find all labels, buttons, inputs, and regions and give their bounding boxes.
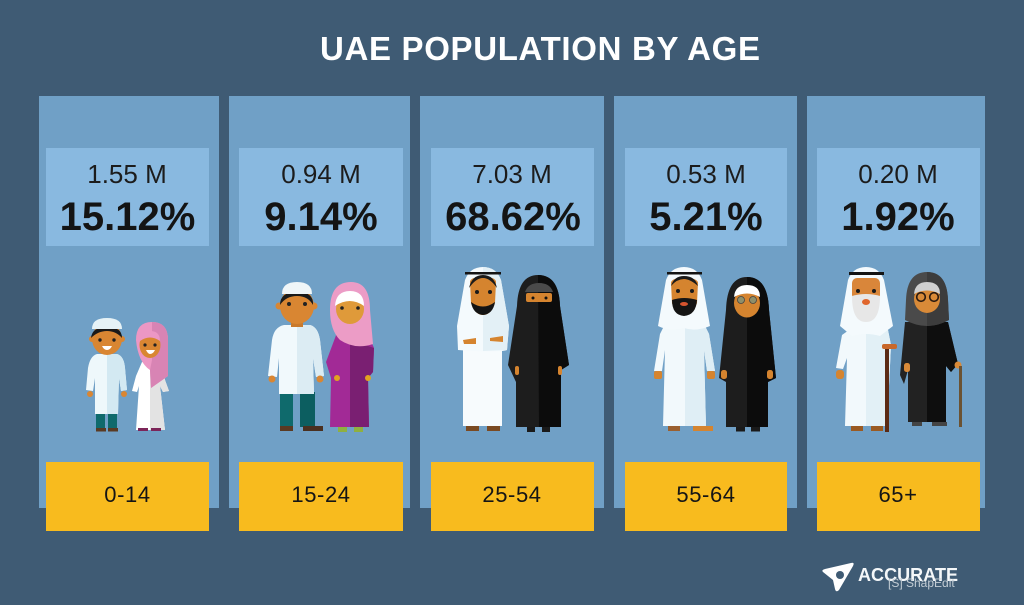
figures: older adults bbox=[654, 267, 776, 432]
figures: adults bbox=[457, 267, 569, 432]
logo wordmark: ACCURATE bbox=[858, 565, 958, 585]
stat box: 15-24: 9.14% bbox=[264, 195, 378, 239]
age label: 0-14: 0-14 bbox=[104, 482, 151, 507]
stat box: 25-54: 7.03 M bbox=[472, 159, 552, 189]
stat box: 0-14: 15.12% bbox=[60, 195, 195, 239]
age label: 15-24: 15-24 bbox=[291, 482, 351, 507]
watermark: [S] ShapEdit bbox=[888, 576, 955, 590]
stat box: 55-64: 5.21% bbox=[649, 195, 763, 239]
age label: 55-64 bbox=[625, 462, 787, 531]
stat box: 0-14: 1.55 M bbox=[87, 159, 167, 189]
stat box: 15-24: 0.94 M bbox=[281, 159, 361, 189]
age label: 15-24 bbox=[239, 462, 403, 531]
title: UAE POPULATION BY AGE bbox=[320, 30, 760, 67]
stat box: 55-64 bbox=[625, 148, 787, 246]
age label: 65+: 65+ bbox=[878, 482, 918, 507]
panel: age 0-14 bbox=[39, 96, 219, 531]
stat box: 65+: 1.92% bbox=[841, 195, 955, 239]
age label: 25-54: 25-54 bbox=[482, 482, 542, 507]
panel: age 55-64 bbox=[614, 96, 797, 531]
logo: Accurate bbox=[822, 563, 958, 591]
figures: seniors bbox=[836, 267, 962, 432]
stat box: 0-14 bbox=[46, 148, 209, 246]
age label: 0-14 bbox=[46, 462, 209, 531]
stat box: 25-54 bbox=[431, 148, 594, 246]
figures: youth bbox=[268, 282, 374, 432]
panel: age 65+ bbox=[807, 96, 985, 531]
age label: 25-54 bbox=[431, 462, 594, 531]
stat box: 65+ bbox=[817, 148, 980, 246]
panel: age 25-54 bbox=[420, 96, 604, 531]
figures: children bbox=[86, 318, 169, 432]
stat box: 65+: 0.20 M bbox=[858, 159, 938, 189]
panel: age 15-24 bbox=[229, 96, 410, 531]
stat box: 15-24 bbox=[239, 148, 403, 246]
age label: 55-64: 55-64 bbox=[676, 482, 736, 507]
icon: logo arrow bbox=[822, 563, 854, 591]
age label: 65+ bbox=[817, 462, 980, 531]
stat box: 55-64: 0.53 M bbox=[666, 159, 746, 189]
stat box: 25-54: 68.62% bbox=[445, 195, 581, 239]
